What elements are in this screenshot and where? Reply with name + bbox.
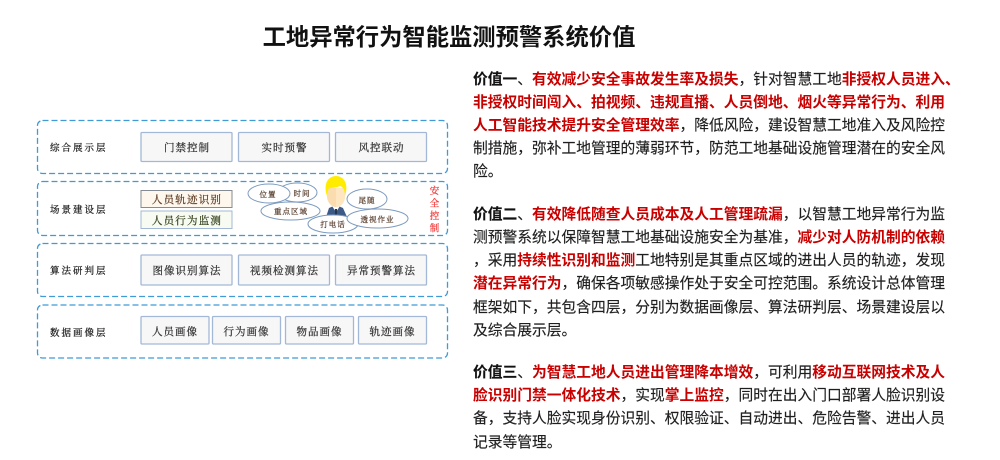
ellipses: behaviours bbox=[248, 183, 408, 233]
layer: 数据画像层: 行为画像 bbox=[224, 325, 270, 338]
text block: value three: 脸识别门禁一体化技术，实现掌上监控，同时在出入门口部署人脸识别设 bbox=[473, 388, 945, 404]
layer: 数据画像层: 物品画像 bbox=[296, 325, 342, 338]
layer: 数据画像层: 人员画像 bbox=[152, 325, 198, 338]
ellipse labels: 位置 bbox=[260, 189, 276, 199]
layer: 综合展示层: 风控联动 bbox=[358, 141, 404, 154]
text block: value two: 潜在异常行为，确保各项敏感操作处于安全可控范围。系统设计总体管理 bbox=[473, 276, 945, 292]
title: 工地异常行为智能监测预警系统价值 bbox=[263, 24, 635, 50]
vertical label: 安全控制: 安 bbox=[430, 185, 440, 197]
text block: value two: 测预警系统以保障智慧工地基础设施安全为基准，减少对人防机制的依赖 bbox=[473, 230, 945, 246]
text block: value one: 制措施，弥补工地管理的薄弱环节，防范工地基础设施管理潜在的安全风 bbox=[473, 141, 945, 157]
text block: value two: 及综合展示层。 bbox=[473, 323, 576, 339]
ellipse labels: 打电话 bbox=[320, 219, 346, 229]
vertical label: 安全控制 bbox=[430, 185, 440, 234]
layer: 算法研判层 bbox=[38, 244, 448, 296]
layer: 算法研判层: 异常预警算法 bbox=[347, 264, 416, 277]
layer: 综合展示层 bbox=[38, 120, 448, 174]
text block: value one bbox=[473, 71, 960, 180]
layer: 综合展示层: 门禁控制 bbox=[164, 141, 210, 154]
layer: 算法研判层: 图像识别算法 bbox=[152, 264, 222, 277]
text block: value two: 框架如下，共包含四层，分别为数据画像层、算法研判层、场景建设层以 bbox=[473, 300, 945, 316]
text block: value three: 备，支持人脸实现身份识别、权限验证、自动进出、危险告警、进出人员 bbox=[473, 411, 945, 427]
layer: 场景建设层: 场景建设层 bbox=[50, 204, 108, 216]
layer: 数据画像层: 轨迹画像 bbox=[370, 325, 416, 338]
text block: value three: 价值三、为智慧工地人员进出管理降本增效，可利用移动互联网技术及人 bbox=[473, 365, 945, 381]
ellipse labels: 时间 bbox=[294, 188, 310, 198]
text block: value two: ，采用持续性识别和监测工地特别是其重点区域的进出人员的轨迹，发现 bbox=[473, 253, 945, 269]
vertical label: 安全控制: 全 bbox=[430, 198, 440, 210]
layer: 场景建设层: 人员轨迹识别 bbox=[152, 193, 222, 206]
icon: worker with yellow hair bbox=[326, 176, 347, 217]
text block: value one: 险。 bbox=[473, 164, 502, 180]
layer: 数据画像层: 数据画像层 bbox=[50, 327, 108, 339]
layer: 场景建设层 bbox=[38, 176, 448, 236]
layer: 综合展示层: 综合展示层 bbox=[50, 142, 108, 154]
text block: value one: 人工智能技术提升安全管理效率，降低风险，建设智慧工地准入及风险控 bbox=[473, 118, 945, 134]
vertical label: 安全控制: 制 bbox=[430, 222, 439, 234]
text block: value two bbox=[473, 206, 945, 339]
layer: 场景建设层: 人员行为监测 bbox=[152, 214, 222, 227]
layer: 算法研判层: 视频检测算法 bbox=[250, 264, 319, 277]
ellipse labels: 透视作业 bbox=[360, 214, 394, 224]
text block: value three bbox=[473, 364, 945, 451]
ellipse labels bbox=[260, 188, 394, 229]
vertical label: 安全控制: 控 bbox=[430, 210, 440, 222]
layer: 算法研判层: 算法研判层 bbox=[50, 265, 108, 277]
layered architecture diagram bbox=[36, 120, 448, 359]
text block: value one: 价值一、有效减少安全事故发生率及损失，针对智慧工地非授权人员进入、 bbox=[473, 72, 960, 88]
layer: 数据画像层 bbox=[38, 305, 448, 358]
text block: value two: 价值二、有效降低随查人员成本及人工管理疏漏，以智慧工地异常行为监 bbox=[473, 207, 945, 223]
ellipse labels: 重点区域 bbox=[274, 206, 308, 216]
text block: value three: 记录等管理。 bbox=[473, 435, 562, 451]
layer: 综合展示层: 实时预警 bbox=[262, 141, 308, 154]
ellipse labels: 尾随 bbox=[358, 195, 376, 205]
text block: value one: 非授权时间闯入、拍视频、违规直播、人员倒地、烟火等异常行为、利用 bbox=[473, 95, 945, 111]
